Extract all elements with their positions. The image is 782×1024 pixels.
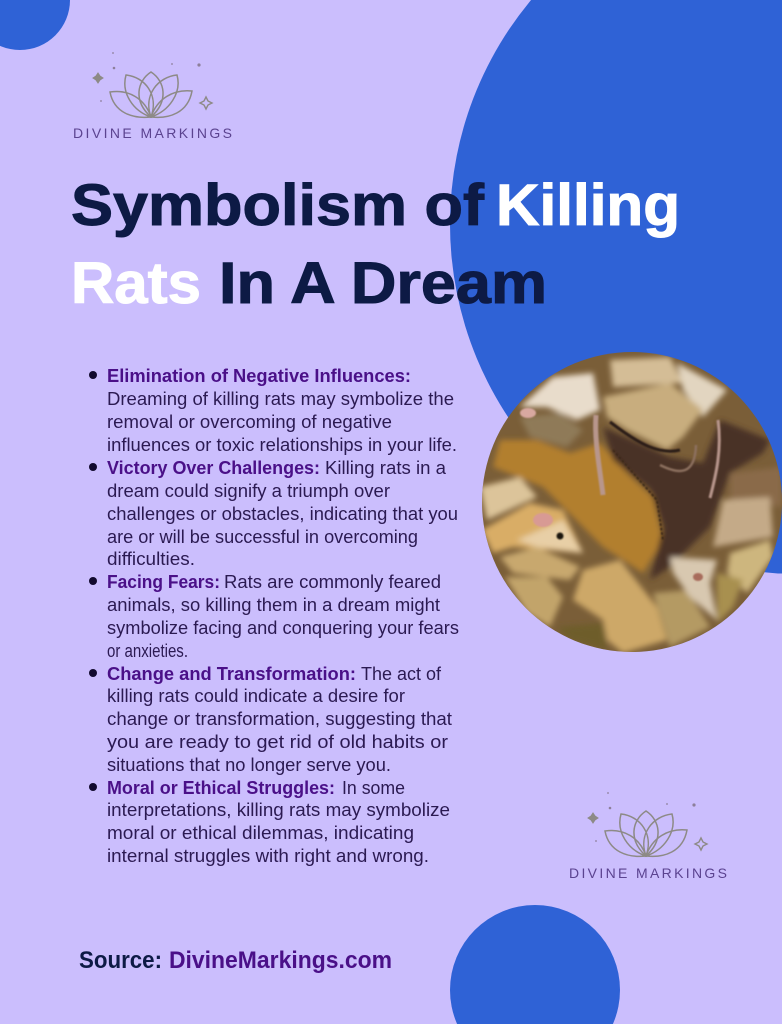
bullet: victory over challenges: Killing rats in a: [325, 458, 447, 478]
icon: lotus: [93, 52, 212, 117]
decorative circle: large right: [450, 0, 782, 574]
bullet: change and transformation: situations that no longer serve you.: [107, 755, 391, 775]
bullet: victory over challenges: [89, 458, 458, 569]
bullet: change and transformation: The act of: [361, 664, 442, 684]
source line: DivineMarkings.com: [169, 947, 392, 974]
bullet: negative influences: [89, 366, 457, 455]
bullet: moral struggles: [89, 778, 450, 866]
bullet: change and transformation: [89, 664, 452, 775]
decorative circle: bottom: [450, 905, 620, 1024]
bullet: negative influences: influences or toxic relationships in your life.: [107, 435, 457, 455]
bullet: victory over challenges: dream could signify a triumph over: [107, 481, 390, 501]
bullet: change and transformation: Change and Transformation:: [107, 664, 356, 684]
bullet: moral struggles: moral or ethical dilemmas, indicating: [107, 823, 414, 843]
bullet: facing fears: Rats are commonly feared: [224, 572, 441, 592]
bullet: change and transformation: change or transformation, suggesting that: [107, 709, 452, 729]
bullet: moral struggles: internal struggles with right and wrong.: [107, 846, 429, 866]
source line: [79, 947, 392, 974]
title: In A Dream: [219, 251, 547, 316]
icon: lotus: [588, 792, 707, 856]
bullet: facing fears: Facing Fears:: [107, 572, 220, 592]
photo: rats in circle: [480, 352, 782, 653]
bullet: negative influences: removal or overcoming of negative: [107, 412, 392, 432]
bullet: change and transformation: you are ready to get rid of old habits or: [107, 732, 448, 752]
title: Killing: [496, 173, 680, 238]
bullet: victory over challenges: challenges or obstacles, indicating that you: [107, 504, 458, 524]
logo wordmark: DIVINE MARKINGS: [569, 865, 727, 881]
bullet: facing fears: animals, so killing them in a dream might: [107, 595, 440, 615]
source line: Source:: [79, 947, 162, 974]
bullet: moral struggles: Moral or Ethical Struggles:: [107, 778, 335, 798]
bullet: moral struggles: In some: [342, 778, 405, 798]
bullet: moral struggles: interpretations, killing rats may symbolize: [107, 800, 450, 820]
logo wordmark: DIVINE MARKINGS: [73, 125, 232, 141]
bullet: change and transformation: killing rats could indicate a desire for: [107, 686, 405, 706]
bullet: victory over challenges: difficulties.: [107, 549, 195, 569]
title: [71, 173, 680, 316]
bullet: facing fears: symbolize facing and conquering your fears: [107, 618, 459, 638]
logo: bottom right: [569, 792, 727, 881]
bullet: victory over challenges: Victory Over Challenges:: [107, 458, 320, 478]
bullet: negative influences: Dreaming of killing rats may symbolize the: [107, 389, 454, 409]
bullet list: [89, 366, 459, 866]
title: Rats: [71, 251, 201, 316]
bullet: facing fears: or anxieties.: [107, 641, 188, 661]
title: Symbolism of: [71, 173, 485, 238]
logo: top left: [73, 52, 232, 141]
decorative circle: top left: [0, 0, 70, 50]
bullet: facing fears: [89, 572, 459, 661]
bullet: negative influences: Elimination of Negative Influences:: [107, 366, 411, 386]
bullet: victory over challenges: are or will be successful in overcoming: [107, 527, 418, 547]
